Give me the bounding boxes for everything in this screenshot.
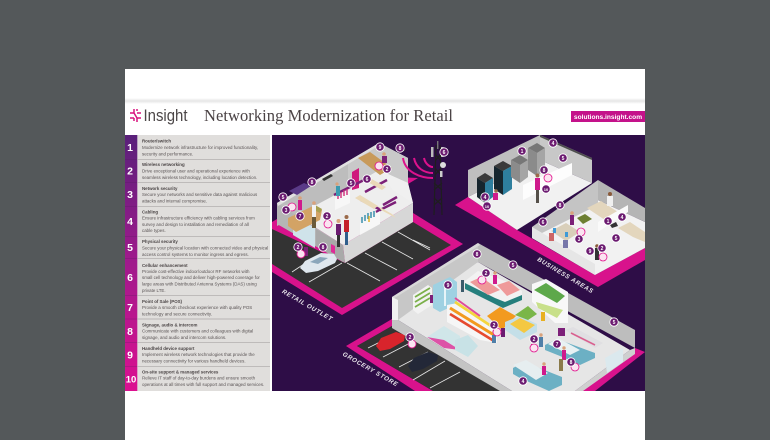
numbered location pins: 5 xyxy=(512,263,515,269)
numbered location pins: 9 xyxy=(589,249,592,255)
service 4: Ensure infrastructure efficiency with cabling services from xyxy=(142,216,255,220)
service 7: Point of Sale (POS) xyxy=(142,299,183,304)
cell tower and signal xyxy=(403,141,446,215)
url badge: solutions.insight.com xyxy=(574,114,642,121)
service 1 xyxy=(127,138,258,156)
numbered location pins: 4 xyxy=(522,379,525,385)
numbered location pins: 4 xyxy=(552,141,555,147)
service 9 xyxy=(127,346,255,364)
service 6: large areas with Distributed Antenna Systems (DAS) using xyxy=(142,282,257,286)
shoppers xyxy=(298,152,387,247)
service 9: Handheld device support xyxy=(142,346,195,351)
numbered location pins: 7 xyxy=(556,342,559,348)
numbered location pins: 5 xyxy=(282,195,285,201)
zone: grocery store xyxy=(341,243,645,391)
numbered location pins: 7 xyxy=(299,214,302,220)
service 4: survey and design to installation and remediation of all xyxy=(142,222,249,227)
service 4 xyxy=(127,210,255,233)
zone: business areas xyxy=(455,135,645,295)
service 4: Cabling xyxy=(142,210,158,214)
numbered location pins: 8 xyxy=(476,252,479,258)
service 8: signage, and audio and intercom solutions. xyxy=(142,335,226,340)
service 7 xyxy=(127,299,252,316)
server racks xyxy=(477,143,545,203)
numbered location pins: 8 xyxy=(311,180,314,186)
business magenta base xyxy=(455,197,645,287)
service 3: Secure your networks and sensitive data against malicious xyxy=(142,192,258,197)
map: isometric retail illustration xyxy=(272,135,645,391)
numbered location pins: 10 xyxy=(485,204,490,209)
header xyxy=(130,106,645,125)
numbered location pins: 9 xyxy=(447,283,450,289)
retail building xyxy=(277,143,413,263)
magenta edge east of grocery xyxy=(575,348,645,391)
service 2: 2 xyxy=(127,166,133,178)
service 6: small cell technology and deliver high-powered coverage for xyxy=(142,275,260,280)
service 7: 7 xyxy=(127,302,133,314)
service 3: 3 xyxy=(127,189,133,201)
numbered location pins: 2 xyxy=(485,271,488,277)
service 10: 10 xyxy=(126,374,136,386)
numbered location pins: 10 xyxy=(544,187,549,192)
service 6: 6 xyxy=(127,272,133,284)
label: RETAIL OUTLET: RETAIL OUTLET xyxy=(281,288,334,323)
numbered location pins xyxy=(279,139,626,385)
service 1: Modernize network infrastructure for improved functionality, xyxy=(142,145,258,150)
numbered location pins: 5 xyxy=(615,236,618,242)
numbered location pins: 2 xyxy=(409,335,412,341)
numbered location pins: 4 xyxy=(484,195,487,201)
numbered location pins: 2 xyxy=(493,323,496,329)
white document panel xyxy=(125,69,645,440)
service 7: technology and secure connectivity. xyxy=(142,312,212,316)
title: Networking Modernization for Retail xyxy=(204,106,453,125)
numbered location pins: 5 xyxy=(562,156,565,162)
service 3: Network security xyxy=(142,186,178,191)
service 9: necessary connectivity for various handheld devices. xyxy=(142,358,246,364)
grocery lot xyxy=(346,319,512,391)
numbered location pins: 2 xyxy=(297,245,300,251)
service 10: On-site support & managed services xyxy=(142,370,219,374)
service 6: Provide cost-effective indoor/outdoor RF networks with xyxy=(142,269,250,274)
url badge xyxy=(571,111,645,122)
service 5: Secure your physical location with connected video and physical xyxy=(142,246,268,250)
service 8: Signage, audio & intercom xyxy=(142,322,197,328)
numbered location pins: 3 xyxy=(578,237,581,243)
service 8: 8 xyxy=(127,326,133,338)
numbered location pins: 8 xyxy=(543,168,546,174)
service 3 xyxy=(127,186,258,204)
service 10 xyxy=(126,370,264,387)
office xyxy=(532,180,645,275)
service 5: 5 xyxy=(127,242,133,254)
service 2: seamless wireless technology, including location detection. xyxy=(142,175,257,180)
service 3: attacks and internal compromise. xyxy=(142,198,207,204)
numbered location pins: 4 xyxy=(621,215,624,221)
numbered location pins: 1 xyxy=(607,219,610,225)
service 1: security and performance. xyxy=(142,151,193,156)
service 9: Implement wireless network technologies that provide the xyxy=(142,352,255,357)
panel: services sidebar xyxy=(125,135,270,391)
numbered location pins: 6 xyxy=(542,220,545,226)
numbered location pins: 2 xyxy=(533,337,536,343)
numbered location pins: 5 xyxy=(350,181,353,187)
numbered location pins: 9 xyxy=(379,145,382,151)
service 6 xyxy=(127,263,260,293)
numbered location pins: 8 xyxy=(570,360,573,366)
customer and car xyxy=(300,247,337,273)
service 6: Cellular enhancement xyxy=(142,263,188,268)
numbered location pins: 8 xyxy=(399,146,402,152)
numbered location pins: 5 xyxy=(613,320,616,326)
service 5 xyxy=(127,239,268,257)
grocery shoppers xyxy=(430,271,566,375)
numbered location pins: 2 xyxy=(601,246,604,252)
service 8: Communicate with customers and colleagues with digital xyxy=(142,328,253,334)
server room xyxy=(468,135,592,230)
service 1: Router/switch xyxy=(142,138,171,144)
service 9: 9 xyxy=(127,350,133,362)
numbered location pins: 6 xyxy=(366,177,369,183)
numbered location pins: 1 xyxy=(521,149,524,155)
numbered location pins: 6 xyxy=(443,150,446,156)
service 2 xyxy=(127,162,257,180)
service 6: private LTE. xyxy=(142,288,166,293)
service 2: Wireless networking xyxy=(142,162,185,167)
service 5: Physical security xyxy=(142,239,178,244)
zone: retail outlet xyxy=(272,143,463,323)
service 5: access control systems to monitor ingress and egress. xyxy=(142,252,249,257)
service 4: cable types. xyxy=(142,228,166,233)
grocery building xyxy=(392,243,635,391)
numbered location pins: 3 xyxy=(285,208,288,214)
service 7: Provide a smooth checkout experience with quality POS xyxy=(142,305,252,310)
service 1: 1 xyxy=(127,142,133,154)
service 2: Drive exceptional user and operational experience with xyxy=(142,168,250,174)
service 4: 4 xyxy=(127,216,133,228)
numbered location pins: 2 xyxy=(386,167,389,173)
numbered location pins: 2 xyxy=(326,214,329,220)
label: BUSINESS AREAS: BUSINESS AREAS xyxy=(536,256,595,295)
retail lot xyxy=(272,175,463,315)
numbered location pins: 8 xyxy=(322,245,325,251)
logo: Insight: Insight xyxy=(144,107,188,125)
service 10: Relieve IT staff of day-to-day burdens and ensure smooth xyxy=(142,376,256,380)
service 8 xyxy=(127,322,253,340)
label: GROCERY STORE: GROCERY STORE xyxy=(341,351,399,389)
numbered location pins: 8 xyxy=(559,203,562,209)
shelving and cases xyxy=(413,271,603,391)
service 10: operations at all times with full support and managed services. xyxy=(142,382,264,387)
